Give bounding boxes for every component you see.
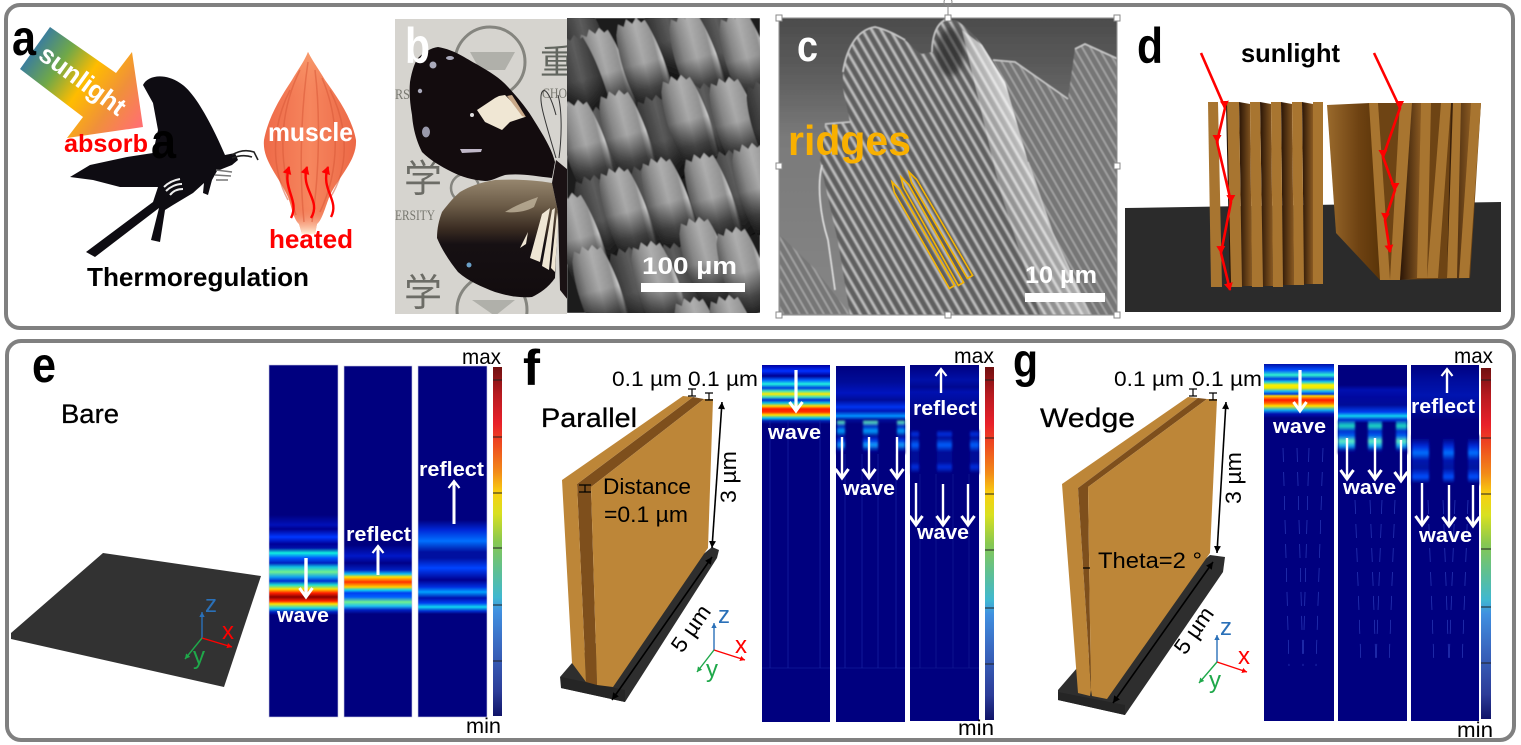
colorbar: max — [954, 345, 994, 368]
panel letter g: g — [1013, 335, 1038, 388]
butterfly photo: 学 — [404, 273, 442, 315]
axes — [185, 591, 234, 670]
label: Bare: Bare — [61, 399, 119, 429]
panel letter c: c — [797, 22, 818, 71]
colorbar: max — [462, 346, 501, 369]
scale label: 10 µm: 10 µm — [1025, 262, 1097, 289]
heatmap: parallel incident: wave — [767, 422, 821, 444]
label: distance: Distance — [603, 474, 691, 499]
panel: bottom row frame — [7, 341, 1514, 740]
label: Thermoregulation: Thermoregulation — [87, 262, 309, 292]
heatmap: wedge penetrating: wave — [1342, 477, 1396, 499]
colorbar: min — [466, 715, 501, 738]
icon: sunlight arrow — [20, 27, 143, 138]
dimension: 5 µm — [1113, 562, 1219, 703]
bare plate — [11, 553, 261, 687]
dimension: widths: 0.1 µm — [1192, 368, 1262, 391]
panel c: ridges SEM — [776, 0, 1120, 318]
floor — [1125, 202, 1501, 312]
label: heated: heated — [269, 224, 353, 254]
panel a: thermoregulation — [12, 10, 356, 292]
colorbar: min — [1457, 719, 1493, 742]
scale bar — [641, 283, 745, 292]
panel letter e: e — [32, 337, 56, 393]
heatmap: parallel penetrating: wave — [842, 478, 895, 500]
panel letter d: d — [1137, 18, 1163, 74]
panel f: parallel fins — [523, 340, 994, 740]
axes: x — [1238, 643, 1250, 670]
panel g: wedge fins — [1013, 335, 1493, 742]
scale label: 100 µm: 100 µm — [642, 253, 737, 280]
icon: sunlight arrow: sunlight — [33, 39, 132, 122]
label: muscle: muscle — [268, 117, 353, 147]
axes: x — [222, 618, 234, 645]
dimension: 3 µm — [1217, 402, 1246, 553]
colorbar — [954, 345, 994, 740]
heatmap: wedge penetrating — [1338, 365, 1407, 721]
axes: y — [193, 643, 205, 670]
colorbar: max — [1454, 345, 1493, 368]
heatmap: parallel incident — [762, 365, 830, 722]
axes: z — [1220, 614, 1232, 641]
scale bar — [1025, 293, 1105, 302]
panel: top row frame — [6, 5, 1513, 328]
dimension: widths: 0.1 µm — [688, 368, 758, 391]
dimension: 3 µm: 3 µm — [716, 451, 741, 503]
selection handles — [776, 0, 1120, 318]
heatmap: parallel deep: wave — [916, 522, 969, 544]
butterfly photo: CHO — [542, 86, 567, 102]
heatmap: wedge deep — [1411, 365, 1479, 721]
heatmap: parallel deep — [910, 365, 979, 721]
dimension: 5 µm — [612, 557, 716, 700]
heatmap: wedge incident — [1264, 364, 1334, 721]
butterfly photo — [395, 19, 567, 314]
dimension: 3 µm — [712, 402, 741, 548]
label: Parallel: Parallel — [541, 403, 637, 433]
label: distance: =0.1 µm — [604, 502, 688, 527]
heatmap: wedge deep: reflect — [1411, 396, 1475, 418]
parallel 3D model — [560, 396, 719, 702]
axes: x — [735, 632, 747, 659]
butterfly photo: RS — [395, 87, 410, 103]
icon: black butterfly — [70, 76, 258, 257]
dimension: widths — [579, 368, 758, 492]
wedge 3D model — [1058, 397, 1225, 715]
dimension: 3 µm: 3 µm — [1221, 452, 1246, 504]
dimension: 5 µm: 5 µm — [666, 600, 716, 657]
label: sunlight: sunlight — [1241, 38, 1340, 68]
heatmap: parallel penetrating — [836, 366, 905, 722]
wedge fins — [1327, 103, 1481, 280]
colorbar — [1454, 345, 1493, 742]
stray letter a: a — [151, 113, 177, 169]
heatmap: wedge incident: wave — [1272, 416, 1326, 438]
label: distance — [603, 474, 691, 527]
ridge outlines — [892, 172, 973, 288]
axes: y — [706, 656, 718, 683]
colorbar — [462, 346, 502, 738]
heatmap: bare reflected later — [418, 366, 487, 717]
dimension: widths: 0.1 µm — [612, 368, 682, 391]
label: absorb: absorb — [64, 130, 148, 158]
heatmap: bare reflected later: reflect — [419, 459, 484, 481]
label: Theta: Theta=2 ° — [1098, 548, 1202, 573]
heatmap: wedge deep: wave — [1418, 525, 1472, 547]
butterfly photo: ERSITY — [395, 208, 435, 224]
dimension: 5 µm: 5 µm — [1169, 602, 1219, 659]
panel d: fin models — [1125, 18, 1501, 312]
label: Wedge: Wedge — [1040, 403, 1135, 433]
colorbar: min — [958, 717, 994, 740]
red light paths — [1201, 53, 1400, 290]
label: ridges: ridges — [788, 117, 911, 164]
axes — [1199, 614, 1250, 694]
dimension: widths — [1083, 368, 1262, 568]
butterfly photo: 学 — [404, 159, 442, 201]
panel letter b: b — [405, 18, 430, 74]
heatmap: parallel deep: reflect — [913, 398, 977, 420]
heatmap: bare reflected — [344, 366, 412, 717]
axes: z — [718, 602, 730, 629]
axes — [697, 602, 747, 683]
panel e: bare surface — [11, 337, 502, 738]
dimension: widths: 0.1 µm — [1114, 368, 1184, 391]
icon: muscle — [264, 52, 356, 234]
axes: z — [205, 591, 217, 618]
panel b: butterfly photo and SEM scales — [395, 18, 760, 314]
heatmap: bare incident: wave — [276, 605, 329, 627]
panel letter f: f — [523, 340, 540, 396]
SEM image — [779, 18, 1118, 315]
heatmap: bare incident — [269, 365, 338, 717]
panel letter a: a — [12, 10, 37, 66]
butterfly photo: 重 — [540, 44, 574, 82]
axes: y — [1209, 667, 1221, 694]
SEM scales image — [567, 18, 760, 313]
heatmap: bare reflected: reflect — [346, 524, 411, 546]
parallel fins — [1208, 102, 1323, 287]
